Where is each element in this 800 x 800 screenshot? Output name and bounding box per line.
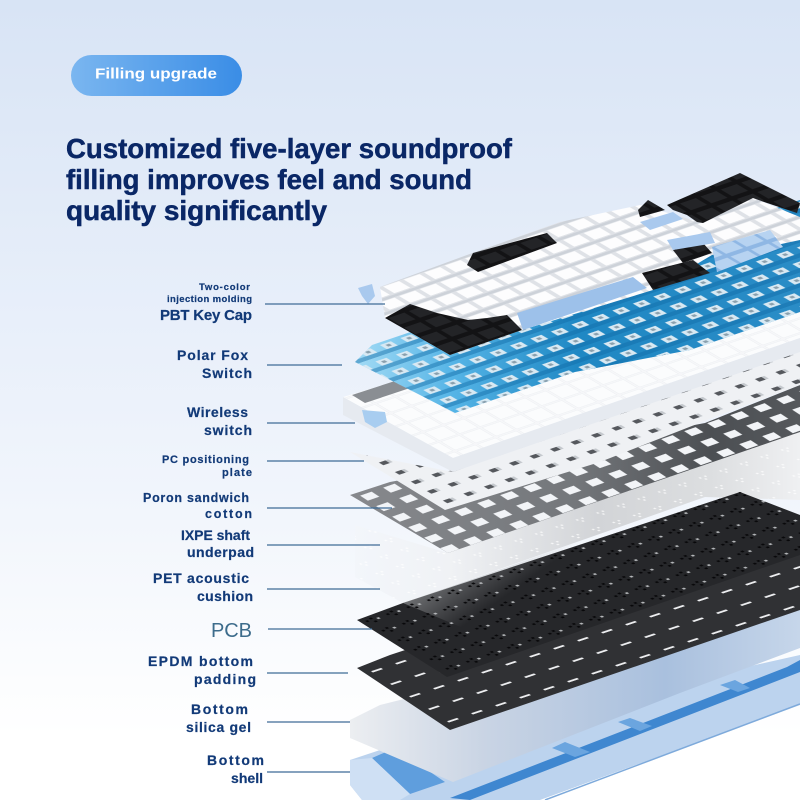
label: EPDM bottom padding: [148, 653, 348, 687]
layer: wireless switch case: [343, 270, 800, 472]
title: [66, 133, 513, 226]
layer: EPDM bottom padding: [357, 520, 800, 730]
label: PC positioning plate: [162, 454, 364, 479]
title: quality significantly: [66, 195, 327, 226]
label: EPDM bottom padding: padding: [194, 671, 256, 687]
layer: PET and IXPE cushions: [355, 425, 800, 603]
label: PBT Key Cap: injection molding: [167, 294, 252, 305]
label: Bottom shell: [207, 752, 350, 786]
label: Bottom shell: shell: [231, 770, 263, 786]
label: Bottom silica gel: Bottom: [191, 701, 248, 717]
layer: bottom silica gel: [350, 600, 800, 782]
layer: PCB: [357, 492, 800, 677]
label: IXPE shaft underpad: IXPE shaft: [181, 527, 250, 543]
label: IXPE shaft underpad: [181, 527, 380, 560]
title: Customized five-layer soundproof: [66, 133, 513, 164]
label: PBT Key Cap: Two-color: [199, 282, 250, 293]
label: PBT Key Cap: [160, 282, 385, 324]
label: Bottom shell: Bottom: [207, 752, 264, 768]
label: Polar Fox Switch: Switch: [202, 365, 252, 381]
label: Wireless switch: Wireless: [187, 404, 248, 420]
label: Bottom silica gel: [186, 701, 350, 735]
layer: PC positioning plate: [350, 345, 800, 510]
layer: bottom shell: [350, 655, 800, 800]
label: Polar Fox Switch: Polar Fox: [177, 347, 248, 363]
badge: Filling upgrade: [71, 55, 242, 96]
label: Wireless switch: [187, 404, 355, 438]
label: PET acoustic cushion: PET acoustic: [153, 570, 249, 586]
layer: Poron sandwich cotton: [350, 385, 800, 553]
label: EPDM bottom padding: EPDM bottom: [148, 653, 253, 669]
label: PET acoustic cushion: cushion: [197, 588, 253, 604]
label: Polar Fox Switch: [177, 347, 342, 381]
label: Poron sandwich cotton: [143, 491, 392, 521]
white keys: [380, 198, 800, 355]
callout labels: [143, 282, 392, 786]
label: Poron sandwich cotton: Poron sandwich: [143, 491, 249, 505]
exploded keyboard illustration: [343, 173, 800, 800]
blue keys: [358, 212, 783, 330]
label: IXPE shaft underpad: underpad: [187, 544, 254, 560]
label: PC positioning plate: PC positioning: [162, 454, 249, 466]
label: PC positioning plate: plate: [222, 467, 252, 479]
label: PBT Key Cap: PBT Key Cap: [160, 307, 252, 324]
layer: Polar Fox switches: [355, 200, 800, 413]
label: PCB: PCB: [211, 620, 252, 642]
badge: Filling upgrade: Filling upgrade: [95, 66, 217, 82]
label: Wireless switch: switch: [204, 422, 252, 438]
label: Bottom silica gel: silica gel: [186, 719, 251, 735]
title: filling improves feel and sound: [66, 164, 472, 195]
black keys: [385, 173, 800, 355]
label: Poron sandwich cotton: cotton: [205, 507, 252, 521]
label: PET acoustic cushion: [153, 570, 380, 604]
layer: PBT key caps: [358, 173, 800, 355]
